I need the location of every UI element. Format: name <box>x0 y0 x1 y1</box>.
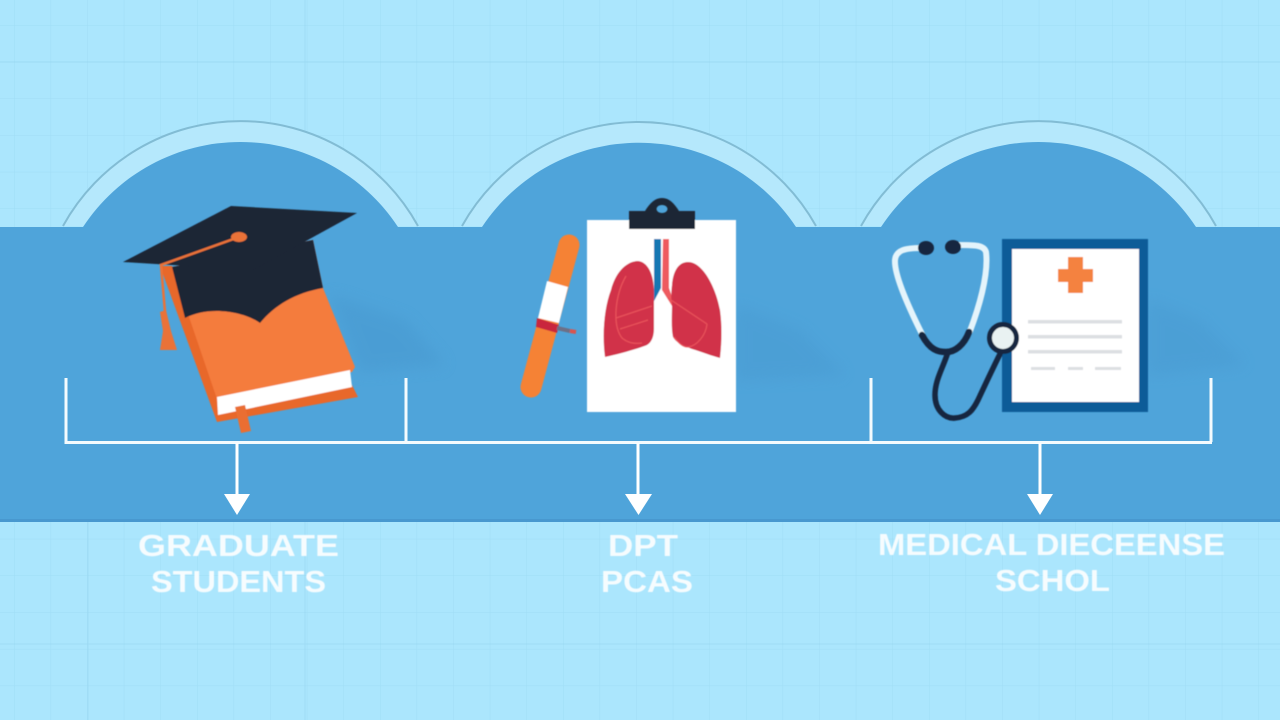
clipboard sheet <box>587 220 736 412</box>
arrow: medical school <box>1027 443 1053 515</box>
arrow: graduate students <box>224 443 250 515</box>
cap base <box>172 240 323 323</box>
label: graduate students <box>138 528 339 599</box>
lungs <box>604 239 722 358</box>
medical cross <box>1058 257 1093 293</box>
book spine <box>160 266 358 422</box>
label: DPT PCAS: PCAS <box>601 564 693 599</box>
central blue band with arches <box>0 121 1280 522</box>
label: DPT PCAS <box>601 528 693 599</box>
label: medical school <box>878 527 1225 598</box>
book pages <box>217 370 352 415</box>
stethoscope <box>895 245 1016 418</box>
label: graduate students: GRADUATE <box>138 528 339 563</box>
arrow: DPT PCAS <box>625 443 652 515</box>
bookmark <box>235 405 251 433</box>
label: DPT PCAS: DPT <box>608 528 678 563</box>
icon: graduation cap on book <box>123 206 358 433</box>
report frame <box>1002 239 1148 412</box>
icon: stethoscope and medical report <box>895 239 1148 418</box>
book cover <box>172 240 355 399</box>
report sheet <box>1012 249 1139 402</box>
label: medical school: SCHOL <box>995 563 1110 598</box>
label: graduate students: STUDENTS <box>151 564 326 599</box>
label: medical school: MEDICAL DIECEENSE <box>878 527 1225 562</box>
clipboard clip <box>629 198 695 229</box>
icon: clipboard with lungs <box>587 198 736 412</box>
cap board <box>123 206 357 270</box>
bracket connector lines <box>66 378 1212 442</box>
report text lines <box>1028 320 1122 370</box>
tassel <box>160 232 247 350</box>
icon: test tube <box>531 245 576 387</box>
